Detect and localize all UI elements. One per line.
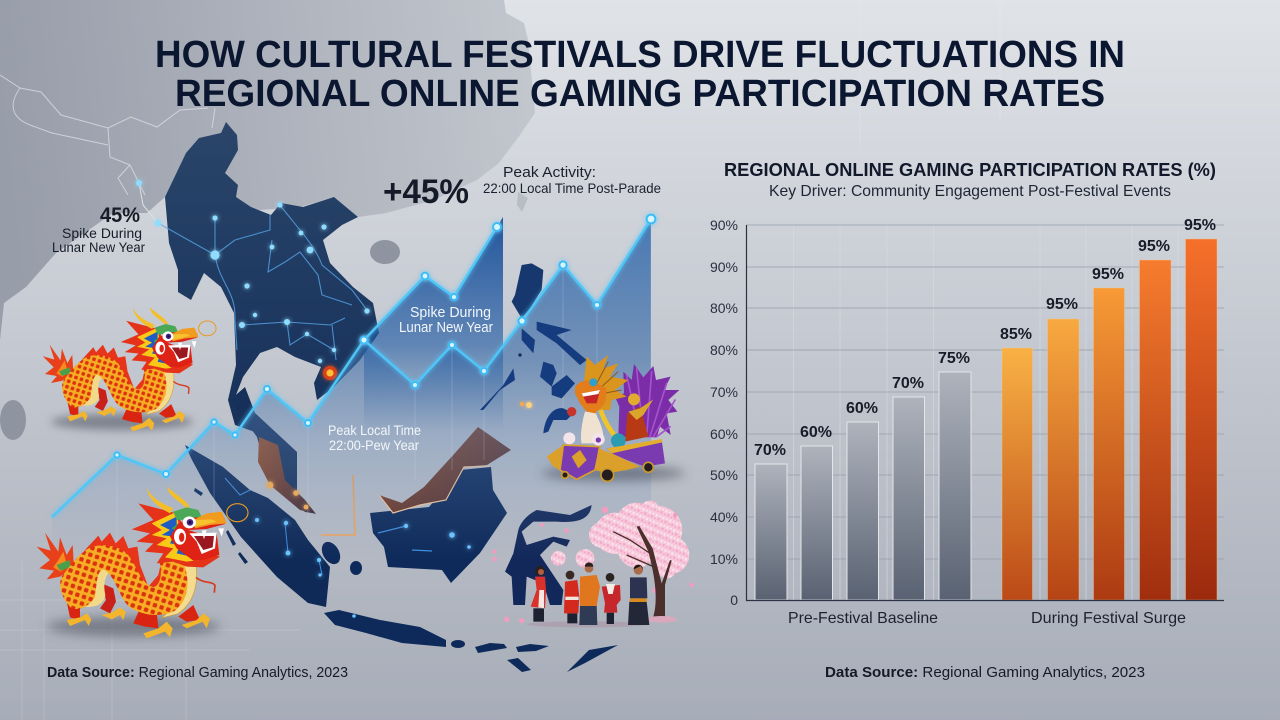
callout: peak local time xyxy=(328,422,421,453)
island: Hainan xyxy=(370,240,400,264)
map: network nodes xyxy=(136,180,370,363)
tree blossoms xyxy=(551,501,689,578)
bar chart xyxy=(710,217,1224,627)
icon: upper dragon xyxy=(43,307,216,431)
map: Philippines xyxy=(480,263,587,433)
line chart: upper series xyxy=(364,223,501,340)
person 1 xyxy=(531,566,546,622)
callout: peak local time: 22:00-Pew Year xyxy=(329,437,419,453)
festival surge bars xyxy=(1002,239,1217,600)
bar value labels: 75% xyxy=(938,350,970,367)
y axis labels: 10% xyxy=(710,551,738,567)
y axis labels: 70% xyxy=(710,384,738,400)
map: mainland Southeast Asia xyxy=(136,122,379,433)
chart heading: REGIONAL ONLINE GAMING PARTICIPATION RATES (%) xyxy=(724,159,1216,180)
bar value labels: 70% xyxy=(754,442,786,459)
axes xyxy=(746,225,1224,600)
map: Java and Lesser Sunda islands xyxy=(194,488,618,672)
callout: peak activity: Peak Activity: xyxy=(503,164,596,181)
callout: spike during lunar new year: Lunar New Year xyxy=(399,320,493,336)
y axis labels: 40% xyxy=(710,509,738,525)
illustration: parade float xyxy=(542,355,685,481)
bar value labels: 95% xyxy=(1092,266,1124,283)
y axis labels: 80% xyxy=(710,300,738,316)
y axis labels: 60% xyxy=(710,426,738,442)
bar value labels: 95% xyxy=(1184,217,1216,234)
bar value labels: 95% xyxy=(1138,238,1170,255)
callout: peak activity: 22:00 Local Time Post-Parade xyxy=(483,180,661,196)
chart subheading: Key Driver: Community Engagement Post-Festival Events xyxy=(769,183,1171,200)
map: orange hotspot xyxy=(323,366,337,380)
title: HOW CULTURAL FESTIVALS DRIVE FLUCTUATIONS IN xyxy=(155,34,1125,76)
person 4 xyxy=(602,573,621,624)
icon: lower dragon xyxy=(37,487,248,638)
callout: peak activity xyxy=(483,164,661,196)
person 2 xyxy=(564,571,579,623)
line chart areas xyxy=(52,215,655,560)
callout: 45% spike: 45% xyxy=(100,204,140,227)
illustration: cherry blossom tree and people xyxy=(492,501,694,627)
y axis labels: 50% xyxy=(710,467,738,483)
title: REGIONAL ONLINE GAMING PARTICIPATION RATES xyxy=(175,73,1105,115)
map: orange link line xyxy=(321,475,355,535)
island: Sri Lanka xyxy=(0,400,26,440)
bar value labels: 60% xyxy=(846,400,878,417)
category labels: During Festival Surge xyxy=(1031,610,1186,627)
map: Malay peninsula xyxy=(230,387,316,514)
pre-festival bars xyxy=(755,372,971,600)
y axis labels: 80% xyxy=(710,342,738,358)
tree trunk xyxy=(637,526,672,617)
category labels: Pre-Festival Baseline xyxy=(788,610,938,627)
title xyxy=(155,34,1125,115)
source note: right: Data Source: Regional Gaming Analytics, 2023 xyxy=(825,664,1145,681)
island: Taiwan xyxy=(517,192,528,212)
y axis labels xyxy=(710,217,738,608)
source note: left: Data Source: Regional Gaming Analytics, 2023 xyxy=(47,664,348,681)
callout: 45% spike: Spike During xyxy=(62,225,142,241)
map: Borneo xyxy=(370,427,511,583)
callout: 45% spike xyxy=(52,204,145,255)
bar value labels: 95% xyxy=(1046,296,1078,313)
person 5 xyxy=(628,565,649,625)
map: country borders and network lines xyxy=(158,205,367,360)
callout: peak local time: Peak Local Time xyxy=(328,422,421,438)
y axis labels: 90% xyxy=(710,217,738,233)
category labels xyxy=(788,610,1186,627)
callout: spike during lunar new year: Spike During xyxy=(410,305,491,321)
bar value labels: 85% xyxy=(1000,326,1032,343)
y axis labels: 0 xyxy=(730,592,738,608)
callout: +45% peak: +45% xyxy=(383,173,469,211)
person 3 xyxy=(579,562,600,625)
spark xyxy=(520,402,532,408)
line chart: lower series xyxy=(52,215,655,517)
bar value labels xyxy=(754,217,1216,459)
map: Sulawesi xyxy=(505,505,592,605)
bar value labels: 60% xyxy=(800,424,832,441)
map: Sumatra xyxy=(185,445,330,607)
background grey landmass xyxy=(0,0,535,340)
y axis labels: 90% xyxy=(710,259,738,275)
callout: 45% spike: Lunar New Year xyxy=(52,239,145,255)
callout: spike during lunar new year xyxy=(399,305,493,336)
bar value labels: 70% xyxy=(892,375,924,392)
